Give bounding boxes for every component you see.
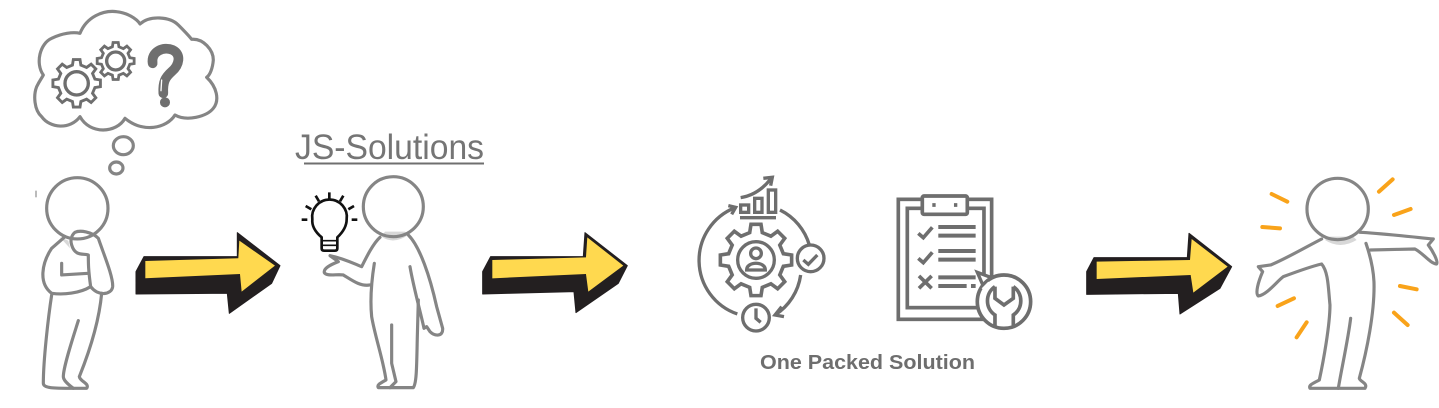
panel: one packed solution icons bbox=[699, 177, 1031, 331]
icon: light bulb bbox=[302, 192, 357, 251]
presenting person figure bbox=[324, 177, 443, 388]
thinking person figure bbox=[36, 178, 113, 388]
happy person figure bbox=[1257, 178, 1437, 388]
icon: gear cycle with chart, check and clock bbox=[699, 177, 824, 331]
icon: clipboard checklist with wrench bbox=[898, 196, 1031, 328]
icon: small gear bbox=[97, 43, 134, 79]
arrow: first yellow arrow bbox=[136, 233, 280, 313]
arrow: third yellow arrow bbox=[1087, 233, 1232, 314]
icon: large gear bbox=[53, 60, 100, 107]
panel: person with idea bbox=[302, 177, 443, 388]
caption: One Packed Solution: One Packed Solution bbox=[760, 352, 975, 374]
icon: orange joy rays bbox=[1262, 179, 1417, 337]
icon: question mark bbox=[152, 49, 178, 107]
panel: thinking person with thought cloud bbox=[35, 11, 217, 388]
arrow: second yellow arrow bbox=[483, 233, 627, 313]
panel: happy person bbox=[1257, 178, 1437, 388]
thought cloud bbox=[35, 11, 217, 174]
heading: JS-Solutions: JS-Solutions bbox=[295, 128, 484, 167]
